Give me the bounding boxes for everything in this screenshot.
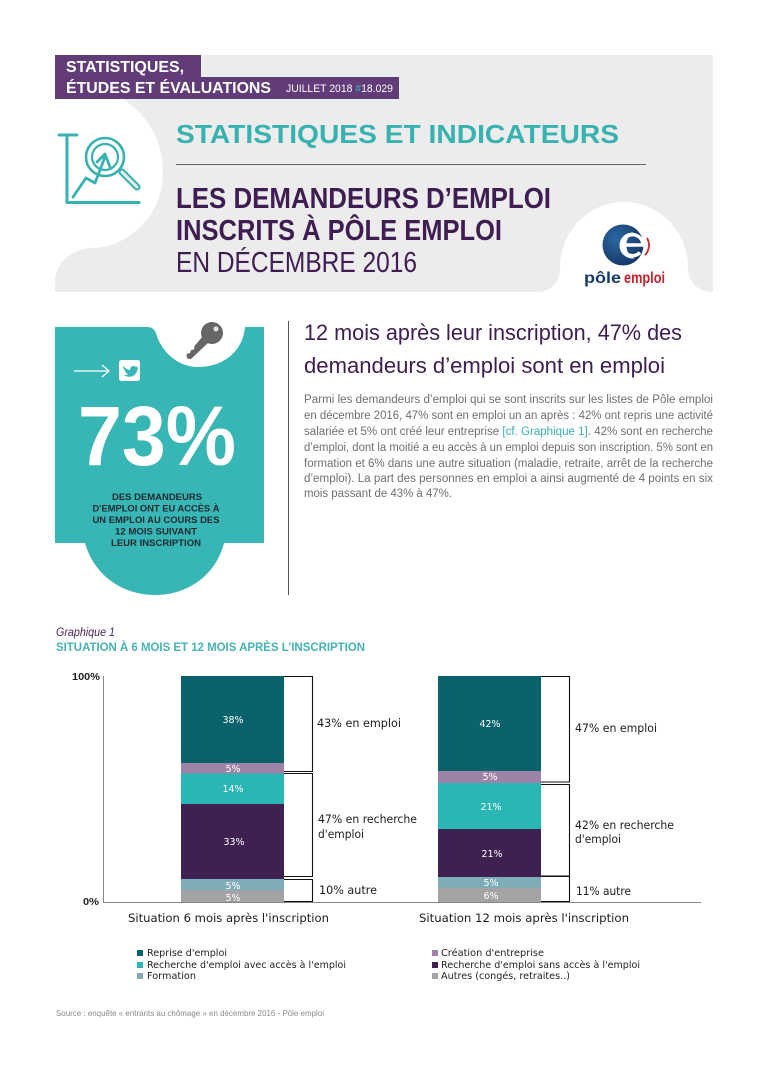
key figure caption: DES DEMANDEURS <box>112 492 202 503</box>
chart heading: Graphique 1 <box>56 625 115 639</box>
bracket labels: 12 months: 47% en emploi <box>575 721 657 735</box>
legend <box>137 947 640 982</box>
axes: 0% <box>83 897 99 908</box>
bar: 12 months: 6% <box>483 891 499 902</box>
bar: 6 months: 5% <box>225 881 241 892</box>
article heading <box>304 320 682 378</box>
legend: Création d'entreprise <box>441 947 544 959</box>
article body: mois passant de 43% à 47%. <box>304 488 452 500</box>
article heading: demandeurs d’emploi sont en emploi <box>304 353 665 378</box>
source note: Source : enquête « entrants au chômage » en décembre 2016 - Pôle emploi <box>56 1008 324 1018</box>
big number: 73% <box>78 389 236 483</box>
article body: Parmi les demandeurs d’emploi qui se sont inscrits sur les listes de Pôle emploi <box>304 394 713 406</box>
axes <box>72 672 701 908</box>
legend: Recherche d'emploi sans accès à l'emploi <box>441 959 640 971</box>
publication tab: JUILLET 2018 #18.029 <box>286 83 393 95</box>
icon: twitter <box>119 360 140 381</box>
article body: formation et 6% dans une autre situation (maladie, retraite, arrêt de la recherche <box>304 458 713 470</box>
publication tab: STATISTIQUES, <box>66 59 184 76</box>
white bubble behind icon <box>55 99 163 282</box>
bar: 6 months: 33% <box>223 837 245 848</box>
main title: EN DÉCEMBRE 2016 <box>176 247 417 279</box>
icon: key <box>186 322 223 359</box>
bar: 6 months: 5% <box>225 893 241 904</box>
bracket labels: 12 months <box>575 721 674 898</box>
axes: 100% <box>72 672 100 683</box>
bracket labels: 12 months: 42% en recherche <box>575 818 674 832</box>
key figure caption: 12 MOIS SUIVANT <box>115 526 197 538</box>
bar: 12 months: 21% <box>481 849 503 860</box>
article body: salariée et 5% ont créé leur entreprise [cf. Graphique 1]. 42% sont en recherche <box>304 426 713 438</box>
key figure caption: LEUR INSCRIPTION <box>111 538 201 549</box>
icon: chart with magnifying glass <box>59 135 139 202</box>
bracket labels: 6 months: 43% en emploi <box>317 716 401 730</box>
legend: Formation <box>147 971 196 982</box>
bar: 12 months: 5% <box>483 878 499 889</box>
bar: 12 months <box>438 676 541 902</box>
legend: Recherche d'emploi avec accès à l'emploi <box>147 959 346 971</box>
logo: pôle emploi <box>584 224 665 287</box>
bracket labels: 12 months: 11% autre <box>576 884 631 898</box>
publication tab <box>55 55 399 99</box>
brackets <box>284 676 570 902</box>
stacked bar chart <box>72 672 701 925</box>
bracket labels: 6 months <box>317 716 417 897</box>
category labels <box>128 911 629 925</box>
header panel <box>55 55 713 292</box>
chart heading: SITUATION À 6 MOIS ET 12 MOIS APRÈS L’INSCRIPTION <box>56 639 365 654</box>
bar: 12 months: 42% <box>479 719 501 730</box>
bracket labels: 6 months: 47% en recherche <box>318 812 417 826</box>
key figure caption: D'EMPLOI ONT EU ACCÈS À <box>92 504 220 514</box>
article body <box>304 394 713 500</box>
bar: 6 months: 38% <box>222 715 244 726</box>
bar: 6 months <box>181 676 284 904</box>
arrow <box>74 365 109 377</box>
article body: d’emploi, dont la moitié a eu accès à un emploi depuis son inscription. 5% sont en <box>304 442 713 454</box>
bar: 6 months: 14% <box>222 784 244 795</box>
chart heading <box>56 625 365 654</box>
legend: Reprise d'emploi <box>147 948 227 959</box>
legend: Autres (congés, retraites..) <box>441 970 570 982</box>
article body: d’emploi). La part des personnes en emploi a ainsi augmenté de 4 points en six <box>304 473 713 485</box>
key figure caption <box>92 492 220 549</box>
logo: pôle emploi: emploi <box>624 270 665 287</box>
bar: 12 months: 21% <box>480 802 502 813</box>
main title: LES DEMANDEURS D’EMPLOI <box>176 183 551 215</box>
article heading: 12 mois après leur inscription, 47% des <box>304 320 682 345</box>
bracket labels: 6 months: 10% autre <box>319 883 377 897</box>
section title: STATISTIQUES ET INDICATEURS <box>176 119 619 149</box>
category labels: Situation 6 mois après l'inscription <box>128 911 329 925</box>
article body: en décembre 2016, 47% sont en emploi un an après : 42% ont repris une activité <box>304 410 713 422</box>
main title <box>176 183 551 279</box>
bracket labels: 12 months: d'emploi <box>575 832 621 846</box>
key figure panel <box>55 322 264 595</box>
bar: 12 months: 5% <box>482 772 498 783</box>
bar: 6 months: 5% <box>225 764 241 775</box>
main title: INSCRITS À PÔLE EMPLOI <box>176 214 502 247</box>
category labels: Situation 12 mois après l'inscription <box>419 911 629 925</box>
bracket labels: 6 months: d'emploi <box>318 827 364 841</box>
publication tab: ÉTUDES ET ÉVALUATIONS <box>66 80 271 97</box>
logo: pôle emploi: pôle <box>584 270 621 287</box>
key figure caption: UN EMPLOI AU COURS DES <box>92 515 220 526</box>
